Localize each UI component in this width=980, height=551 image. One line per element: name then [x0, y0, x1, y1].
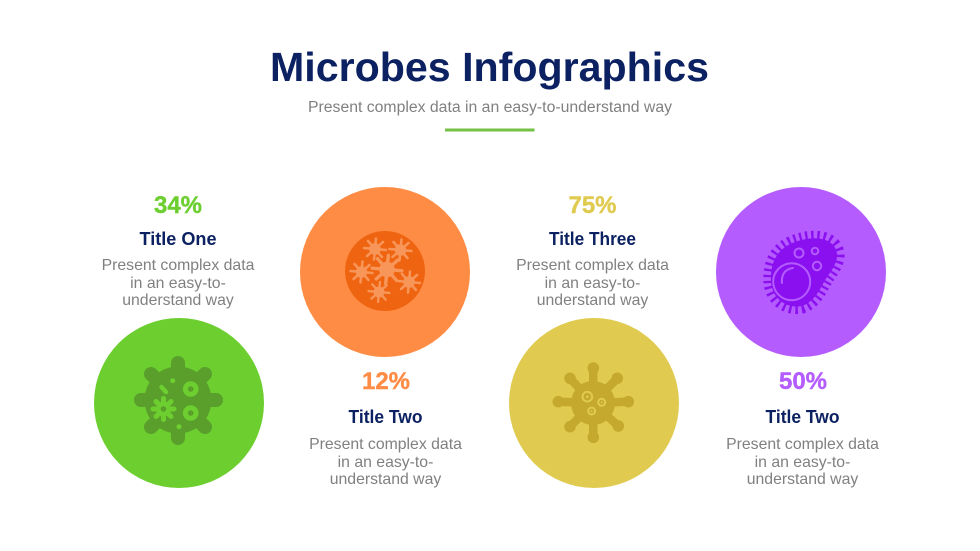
green circle	[94, 318, 264, 488]
heading: Title Three	[549, 229, 636, 249]
accent underline	[445, 128, 534, 132]
description: in an easy-to-	[338, 454, 433, 471]
percentage: 34%	[154, 192, 202, 219]
icon: bacterium	[771, 238, 837, 307]
percentage: 75%	[568, 192, 616, 219]
description: understand way	[122, 292, 234, 309]
panel: title two purple	[716, 187, 886, 488]
description: in an easy-to-	[545, 275, 640, 292]
title: Microbes Infographics	[270, 44, 709, 90]
header	[270, 44, 709, 132]
description: Present complex data	[726, 436, 879, 453]
description: understand way	[747, 471, 858, 488]
purple circle	[716, 187, 886, 357]
percentage: 12%	[362, 368, 410, 395]
description: Present complex data	[309, 436, 462, 453]
description: in an easy-to-	[130, 275, 226, 292]
icon: spiked virus	[141, 363, 216, 438]
icon: star microbes	[345, 231, 425, 311]
heading: Title One	[140, 229, 216, 249]
panel: title three	[509, 192, 679, 488]
panel: title one	[94, 192, 264, 488]
heading: Title Two	[766, 407, 840, 427]
description: understand way	[537, 292, 648, 309]
description: understand way	[330, 471, 441, 488]
panel: title two orange	[300, 187, 470, 488]
percentage: 50%	[779, 368, 827, 395]
subtitle: Present complex data in an easy-to-understand way	[308, 99, 672, 116]
icon: amoeba	[552, 362, 634, 443]
heading: Title Two	[348, 407, 422, 427]
orange circle	[300, 187, 470, 357]
yellow circle	[509, 318, 679, 488]
description: Present complex data	[102, 257, 255, 274]
description: in an easy-to-	[755, 454, 850, 471]
description: Present complex data	[516, 257, 669, 274]
